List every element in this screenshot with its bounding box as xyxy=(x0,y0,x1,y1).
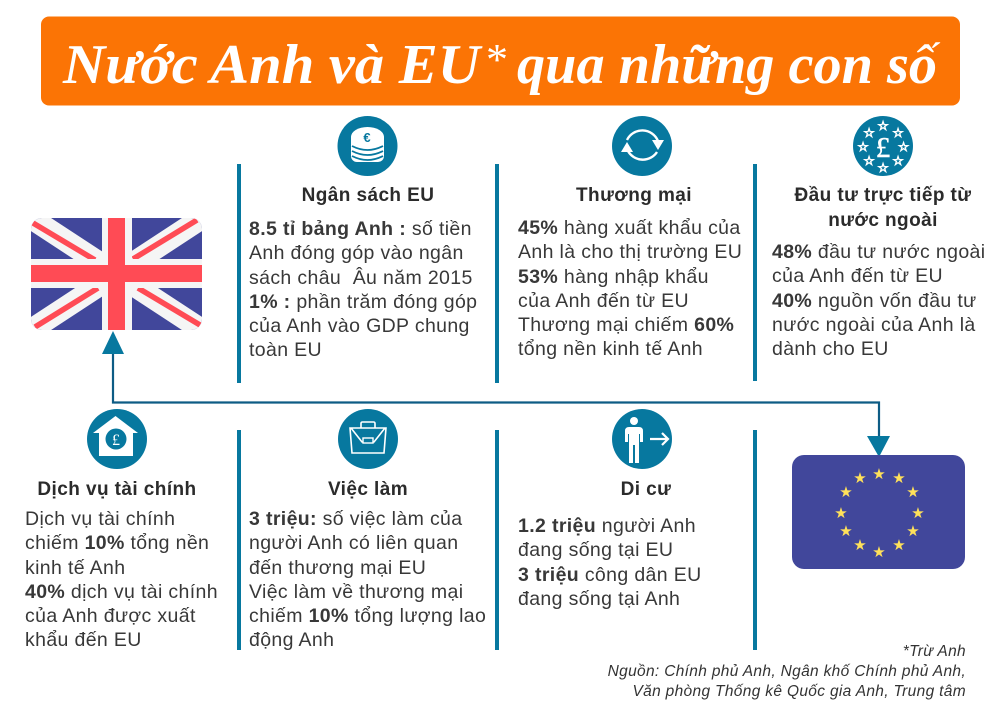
source note: Văn phòng Thống kê Quốc gia Anh, Trung tâm xyxy=(632,683,966,700)
icon: pound with stars: ★ xyxy=(858,140,868,154)
text: jobs: người Anh có liên quan xyxy=(249,532,458,554)
text: jobs: động Anh xyxy=(249,629,334,651)
text: EU budget xyxy=(249,218,477,361)
text: EU budget: toàn EU xyxy=(249,339,322,361)
text: trade: Anh là cho thị trường EU xyxy=(518,241,742,263)
text: trade: Thương mại chiếm 60% xyxy=(518,314,734,336)
text: EU budget: sách châu Âu năm 2015 xyxy=(249,267,473,289)
icon: EU flag: ★ xyxy=(911,504,925,522)
text: EU budget: Anh đóng góp vào ngân xyxy=(249,242,464,264)
heading: EU budget: Ngân sách EU xyxy=(302,185,434,206)
heading: jobs: Việc làm xyxy=(328,479,408,500)
title banner xyxy=(41,16,960,106)
icon: EU flag: ★ xyxy=(906,483,920,501)
text: financial services: chiếm 10% tổng nền xyxy=(25,532,209,554)
icon: EU flag: ★ xyxy=(839,522,853,540)
text: foreign direct investment: nước ngoài của Anh là xyxy=(772,314,976,336)
heading: foreign direct investment: nước ngoài xyxy=(828,210,938,231)
icon: pound with stars: ★ xyxy=(864,126,874,140)
text: foreign direct investment: 40% nguồn vốn đầu tư xyxy=(772,290,977,312)
text: trade: của Anh đến từ EU xyxy=(518,290,689,312)
text: financial services: khẩu đến EU xyxy=(25,629,142,651)
text: migration: đang sống tại EU xyxy=(518,539,673,561)
text: financial services: kinh tế Anh xyxy=(25,557,125,579)
text: jobs: chiếm 10% tổng lượng lao xyxy=(249,605,486,627)
source note: *Trừ Anh xyxy=(903,643,966,660)
text: migration: đang sống tại Anh xyxy=(518,588,680,610)
icon: financial house: £ xyxy=(112,432,120,449)
icon: coin stack: € xyxy=(363,130,371,145)
icon: EU flag: ★ xyxy=(892,469,906,487)
heading: trade: Thương mại xyxy=(576,185,692,206)
heading: foreign direct investment: Đầu tư trực tiếp từ xyxy=(794,185,972,206)
text: EU budget: của Anh vào GDP chung xyxy=(249,315,470,337)
text: financial services xyxy=(25,508,218,651)
heading: financial services: Dịch vụ tài chính xyxy=(37,479,197,500)
icon: pound with stars: ★ xyxy=(899,140,909,154)
text: foreign direct investment: 48% đầu tư nước ngoài xyxy=(772,241,985,263)
heading: foreign direct investment xyxy=(794,185,972,231)
source note xyxy=(608,643,966,700)
icon: EU flag: ★ xyxy=(892,536,906,554)
icon: EU flag: ★ xyxy=(853,469,867,487)
icon: EU flag: ★ xyxy=(872,465,886,483)
text: foreign direct investment: của Anh đến từ EU xyxy=(772,265,943,287)
text: financial services: của Anh được xuất xyxy=(25,605,196,627)
text: jobs: 3 triệu: số việc làm của xyxy=(249,508,462,530)
text: foreign direct investment: dành cho EU xyxy=(772,338,889,360)
icon: pound with stars: ★ xyxy=(864,154,874,168)
text: trade: 53% hàng nhập khẩu xyxy=(518,266,709,288)
heading: migration: Di cư xyxy=(621,479,671,500)
text: migration xyxy=(518,515,702,610)
text: jobs: Việc làm về thương mại xyxy=(249,581,463,603)
icon: pound with stars: ★ xyxy=(893,154,903,168)
text: trade: 45% hàng xuất khẩu của xyxy=(518,217,741,239)
title banner: qua những con số xyxy=(517,34,941,96)
title banner: * xyxy=(486,35,508,84)
icon: EU flag: ★ xyxy=(839,483,853,501)
icon: pound with stars: ★ xyxy=(893,126,903,140)
text: migration: 1.2 triệu người Anh xyxy=(518,515,696,537)
text: foreign direct investment xyxy=(772,241,985,360)
icon: UK flag xyxy=(31,218,202,330)
text: EU budget: 1% : phần trăm đóng góp xyxy=(249,291,477,313)
icon: EU flag: ★ xyxy=(834,504,848,522)
icon: EU flag: ★ xyxy=(906,522,920,540)
text: trade xyxy=(518,217,742,360)
text: migration: 3 triệu công dân EU xyxy=(518,564,702,586)
text: EU budget: 8.5 tỉ bảng Anh : số tiền xyxy=(249,218,472,240)
icon: pound with stars: ★ xyxy=(878,120,888,132)
icon: EU flag: ★ xyxy=(872,543,886,561)
icon: pound with stars: £ xyxy=(876,132,890,164)
icon: pound with stars: ★ xyxy=(878,162,888,174)
text: jobs xyxy=(249,508,486,651)
title banner: Nước Anh và EU xyxy=(62,34,483,96)
text: jobs: đến thương mại EU xyxy=(249,557,426,579)
source note: Nguồn: Chính phủ Anh, Ngân khố Chính phủ Anh, xyxy=(608,663,966,680)
text: trade: tổng nền kinh tế Anh xyxy=(518,338,703,360)
text: financial services: 40% dịch vụ tài chính xyxy=(25,581,218,603)
text: financial services: Dịch vụ tài chính xyxy=(25,508,175,530)
icon: EU flag: ★ xyxy=(853,536,867,554)
